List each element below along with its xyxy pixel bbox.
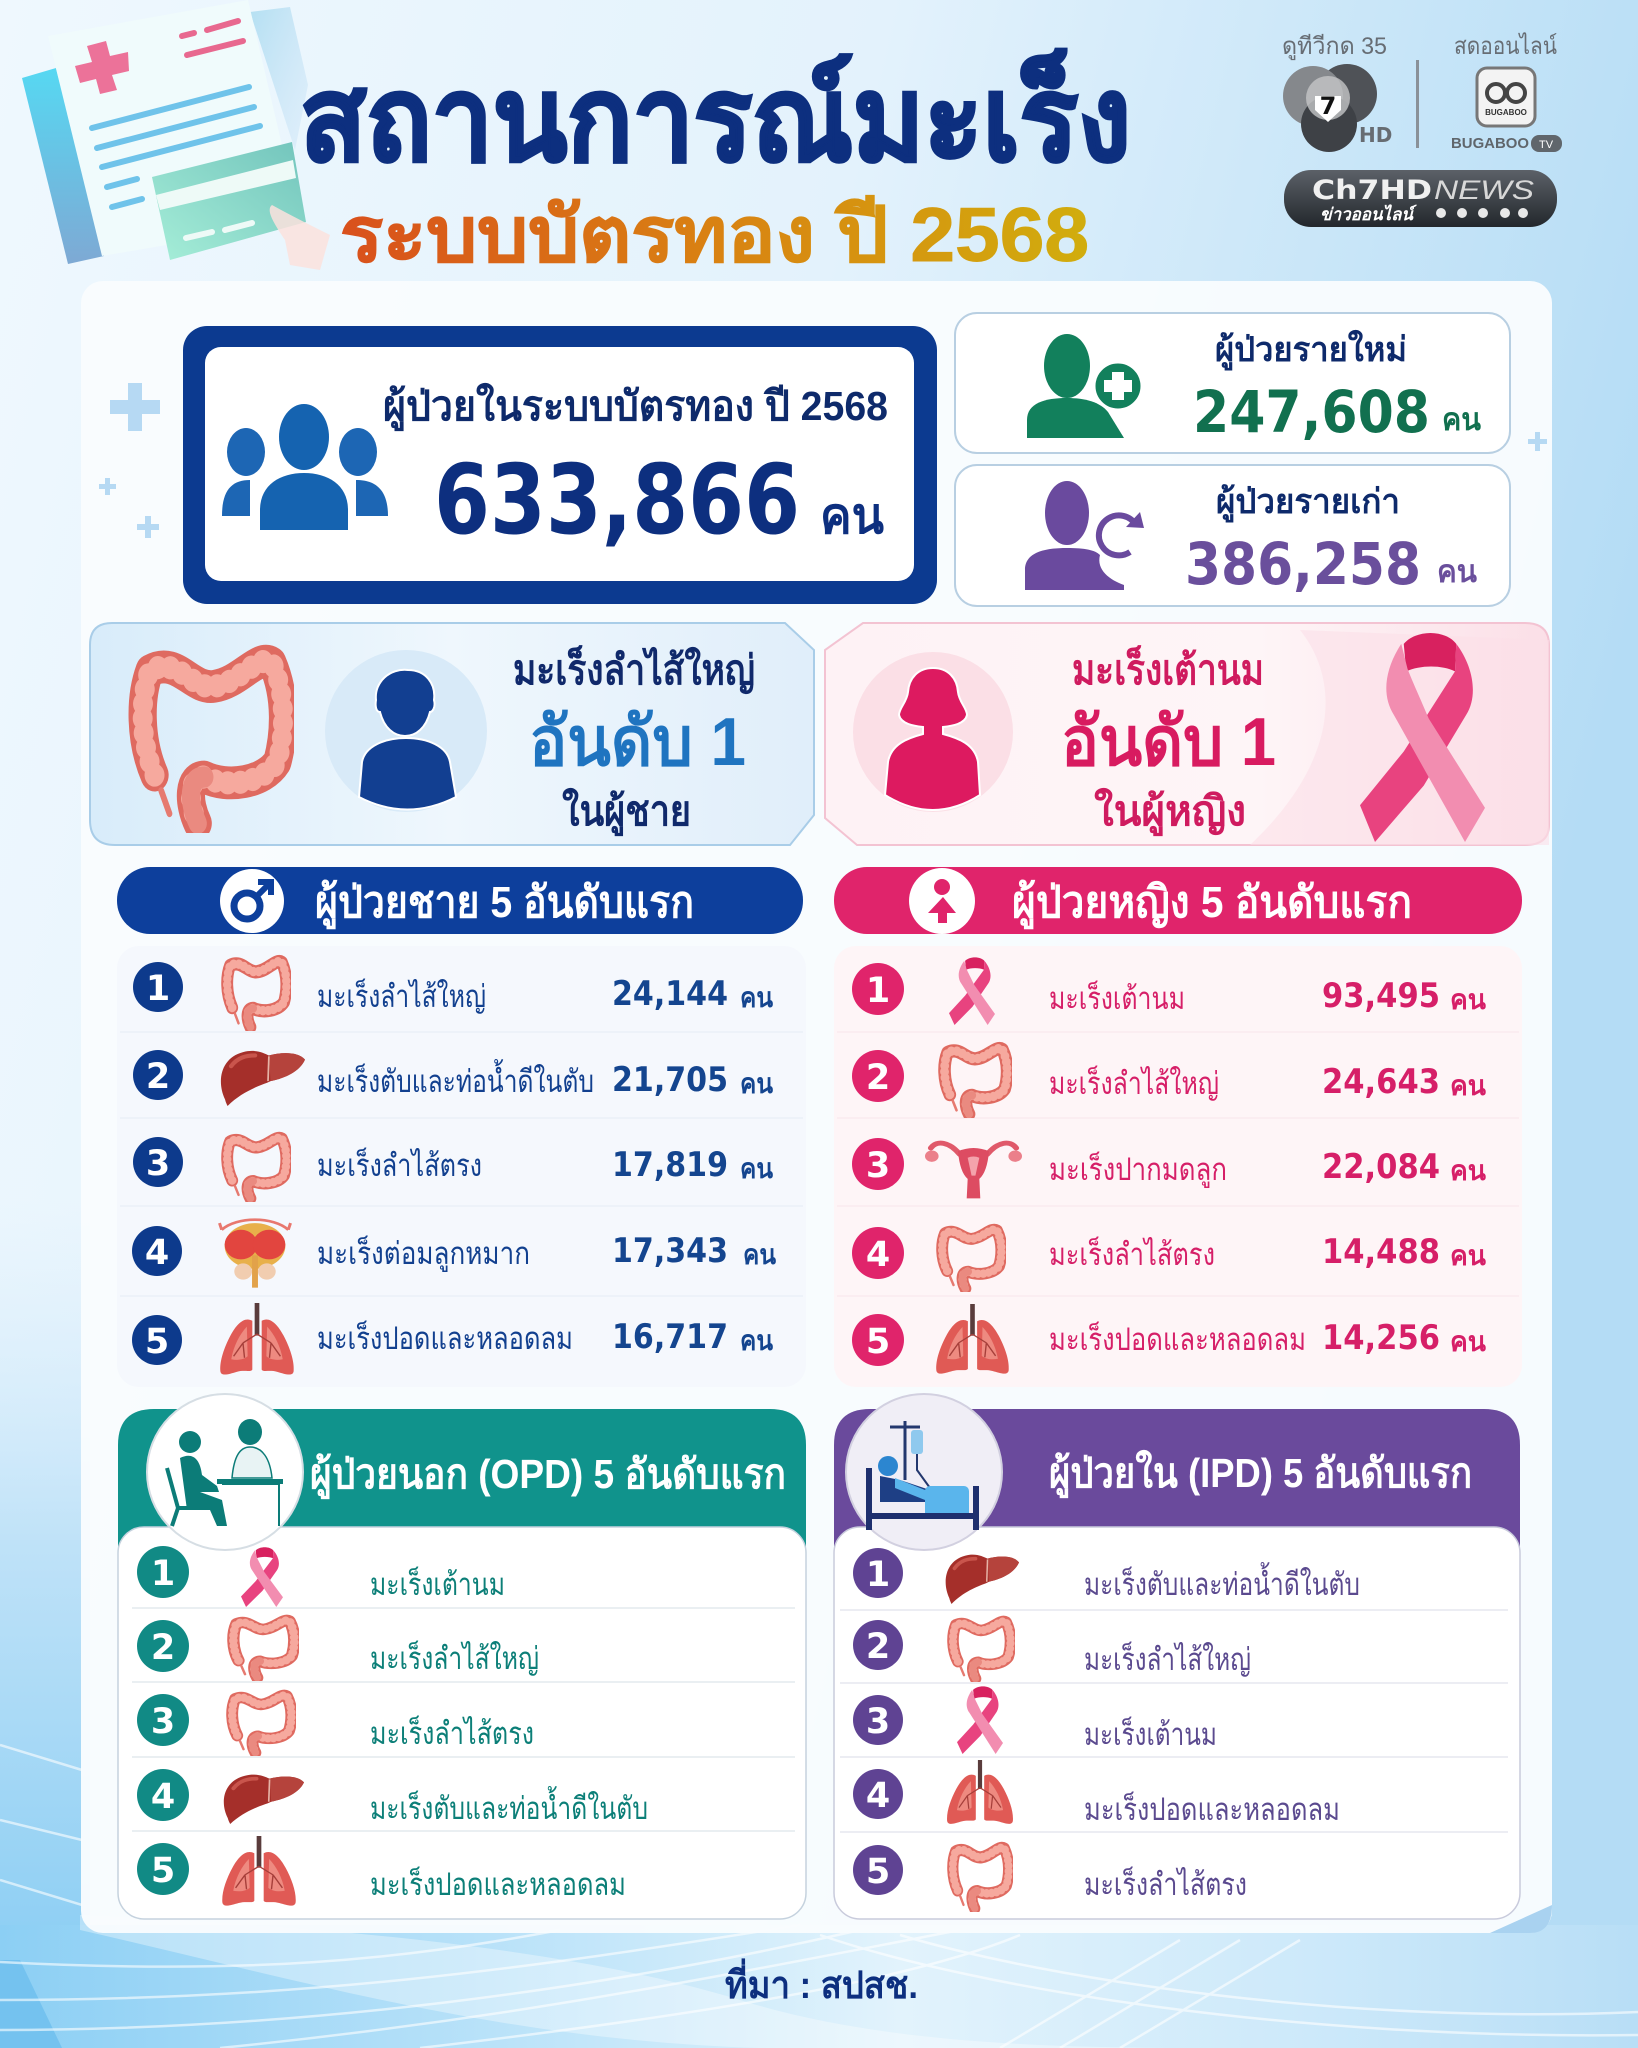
icon: man <box>325 650 487 812</box>
row 2 <box>137 1620 539 1678</box>
banner: top cancer in men <box>90 623 814 845</box>
number: returning: 386,258 <box>1185 530 1421 598</box>
row 5: 5 <box>866 1322 890 1362</box>
row 1 <box>852 957 1486 1025</box>
row 2: มะเร็งลำไส้ใหญ่ <box>1049 1065 1219 1101</box>
row 1: คน <box>1450 984 1486 1015</box>
decorative plus signs <box>99 383 1547 538</box>
row 3: มะเร็งลำไส้ตรง <box>317 1147 482 1183</box>
row 4: มะเร็งลำไส้ตรง <box>1049 1236 1215 1272</box>
row 4: 14,488 <box>1322 1232 1440 1272</box>
broadcaster logos <box>1282 32 1562 227</box>
banner: top cancer in women <box>825 623 1549 845</box>
icon: person refresh <box>1025 481 1144 590</box>
row 2: 2 <box>866 1058 890 1098</box>
row 4 <box>132 1220 776 1288</box>
row 2: 2 <box>151 1628 175 1668</box>
row 3: คน <box>740 1153 773 1184</box>
logo: Ch7HD News pill: Ch7HD <box>1312 175 1432 206</box>
subtitle: ระบบบัตรทอง ปี 2568 <box>340 193 1089 278</box>
logo: channel 7 HD: 7 <box>1320 92 1336 120</box>
row 4: 4 <box>866 1776 890 1816</box>
row 1: คน <box>740 982 773 1013</box>
heading: ผู้ป่วยนอก (OPD) 5 อันดับแรก <box>310 1451 786 1500</box>
row 1 <box>133 962 773 1027</box>
row 5: มะเร็งปอดและหลอดลม <box>1049 1321 1306 1357</box>
row 3: มะเร็งเต้านม <box>1084 1716 1217 1752</box>
logo label: channel: ดูทีวีกด 35 <box>1282 33 1387 61</box>
row 4: 4 <box>866 1235 890 1275</box>
icon: doctor consultation <box>147 1394 303 1550</box>
heading: ผู้ป่วยชาย 5 อันดับแรก <box>315 878 694 929</box>
panel: women top 5 <box>834 946 1522 1387</box>
header: women top 5 <box>834 867 1522 934</box>
row 3 <box>852 1138 1486 1198</box>
row 4 <box>137 1769 648 1826</box>
label: มะเร็งลำไส้ใหญ่ <box>513 645 755 694</box>
logo: Ch7HD News pill: ข่าวออนไลน์ <box>1320 204 1417 224</box>
row 1: มะเร็งตับและท่อน้ำดีในตับ <box>1084 1562 1360 1602</box>
logo: bugaboo: BUGABOO <box>1451 135 1529 152</box>
icon: inpatient bed <box>846 1394 1002 1550</box>
logo: Ch7HD News pill <box>1284 170 1557 227</box>
logo: channel 7 HD <box>1283 64 1392 152</box>
row 5: 5 <box>151 1851 175 1891</box>
row 3: 3 <box>151 1702 175 1742</box>
row 1 <box>853 1548 1360 1604</box>
row 3: 3 <box>866 1146 890 1186</box>
panel: men top 5 <box>117 946 806 1387</box>
row 3: 17,819 <box>612 1145 728 1185</box>
row 1: 1 <box>151 1554 175 1594</box>
row 2 <box>133 1050 773 1106</box>
icon: male symbol <box>220 869 284 933</box>
icon: female symbol <box>909 868 975 934</box>
row 4: คน <box>1450 1240 1486 1271</box>
row 5: 5 <box>866 1852 890 1892</box>
label: total: ผู้ป่วยในระบบบัตรทอง ปี 2568 <box>383 382 888 432</box>
logo: Ch7HD News pill: NEWS <box>1434 175 1534 205</box>
row 2: คน <box>1450 1070 1486 1101</box>
row 5 <box>853 1845 1247 1908</box>
row 4: มะเร็งตับและท่อน้ำดีในตับ <box>370 1786 648 1826</box>
row 5: มะเร็งลำไส้ตรง <box>1084 1866 1247 1902</box>
logo: channel 7 HD: HD <box>1359 123 1392 147</box>
row 5: 14,256 <box>1322 1318 1440 1358</box>
row 5: คน <box>740 1325 773 1356</box>
rank: อันดับ 1 <box>529 704 746 780</box>
panel: OPD top 5 <box>118 1394 806 1919</box>
label: ในผู้ชาย <box>562 787 691 837</box>
label: new: ผู้ป่วยรายใหม่ <box>1215 329 1407 371</box>
row 3: คน <box>1450 1155 1486 1186</box>
row 5: คน <box>1450 1326 1486 1357</box>
label: มะเร็งเต้านม <box>1072 645 1264 693</box>
row 1: 1 <box>866 1555 890 1595</box>
unit: คน <box>1442 402 1481 437</box>
row 2: คน <box>740 1068 773 1099</box>
row 1 <box>137 1546 505 1607</box>
icon: woman <box>853 652 1013 812</box>
unit: คน <box>1437 554 1477 589</box>
row 2: 2 <box>146 1057 170 1097</box>
label: ในผู้หญิง <box>1094 787 1246 837</box>
row 2: 21,705 <box>612 1060 728 1100</box>
row 3: 22,084 <box>1322 1147 1440 1187</box>
row 1: มะเร็งเต้านม <box>370 1566 505 1602</box>
panel: IPD top 5 <box>834 1394 1520 1919</box>
row 2: มะเร็งตับและท่อน้ำดีในตับ <box>317 1059 594 1099</box>
title: สถานการณ์มะเร็ง <box>300 48 1131 186</box>
card: total patients <box>183 326 937 604</box>
row 3 <box>137 1694 534 1753</box>
row 4: คน <box>743 1239 776 1270</box>
row 1: มะเร็งลำไส้ใหญ่ <box>317 978 486 1014</box>
main white panel <box>81 281 1552 1933</box>
row 3: มะเร็งลำไส้ตรง <box>370 1715 534 1751</box>
row 1: 24,144 <box>612 974 728 1014</box>
logo: bugaboo <box>1451 68 1562 152</box>
card: new patients <box>955 313 1510 453</box>
row 4: 17,343 <box>612 1231 728 1271</box>
heading: ผู้ป่วยใน (IPD) 5 อันดับแรก <box>1049 1449 1472 1499</box>
card: returning patients <box>955 465 1510 606</box>
number: total: 633,866 <box>434 444 800 556</box>
number: new: 247,608 <box>1193 378 1430 446</box>
logo label: online: สดออนไลน์ <box>1454 32 1557 60</box>
illustration: medical document and card <box>22 0 330 270</box>
row 4: มะเร็งปอดและหลอดลม <box>1084 1791 1340 1827</box>
row 1: 93,495 <box>1322 976 1440 1016</box>
row 3: 3 <box>866 1702 890 1742</box>
row 3 <box>853 1686 1217 1754</box>
rank: อันดับ 1 <box>1061 704 1276 780</box>
row 1: 1 <box>866 971 890 1011</box>
icon: three people <box>222 404 388 530</box>
row 4 <box>853 1760 1340 1827</box>
logo: bugaboo: TV <box>1539 139 1554 151</box>
logo: bugaboo: BUGABOO <box>1485 108 1527 117</box>
row 2: มะเร็งลำไส้ใหญ่ <box>370 1640 539 1676</box>
header: men top 5 <box>117 867 803 934</box>
row 5: มะเร็งปอดและหลอดลม <box>370 1866 626 1902</box>
row 4: 4 <box>145 1233 169 1273</box>
icon: large intestine <box>143 661 283 823</box>
unit: คน <box>820 488 884 544</box>
row 5: 5 <box>145 1322 169 1362</box>
source line: ที่มา : สปสช. <box>725 1958 918 2007</box>
row 2: 2 <box>866 1627 890 1667</box>
row 5: มะเร็งปอดและหลอดลม <box>317 1320 573 1356</box>
row 2 <box>852 1049 1486 1114</box>
row 3: มะเร็งปากมดลูก <box>1049 1151 1227 1188</box>
row 4: 4 <box>151 1777 175 1817</box>
row 5 <box>132 1303 773 1375</box>
row 5 <box>137 1836 626 1906</box>
row 5: 16,717 <box>612 1317 728 1357</box>
row 1: 1 <box>146 969 170 1009</box>
row 2: 24,643 <box>1322 1062 1440 1102</box>
icon: person plus <box>1027 334 1142 438</box>
row 2: มะเร็งลำไส้ใหญ่ <box>1084 1641 1251 1677</box>
row 4: มะเร็งต่อมลูกหมาก <box>317 1235 530 1272</box>
row 2 <box>853 1620 1251 1679</box>
row 1: มะเร็งเต้านม <box>1049 980 1185 1016</box>
row 5 <box>852 1304 1486 1374</box>
row 4 <box>852 1227 1486 1288</box>
row 3 <box>133 1137 773 1198</box>
heading: ผู้ป่วยหญิง 5 อันดับแรก <box>1012 878 1412 929</box>
label: returning: ผู้ป่วยรายเก่า <box>1216 483 1400 523</box>
row 3: 3 <box>146 1144 170 1184</box>
icon: pink ribbon <box>1360 633 1485 842</box>
